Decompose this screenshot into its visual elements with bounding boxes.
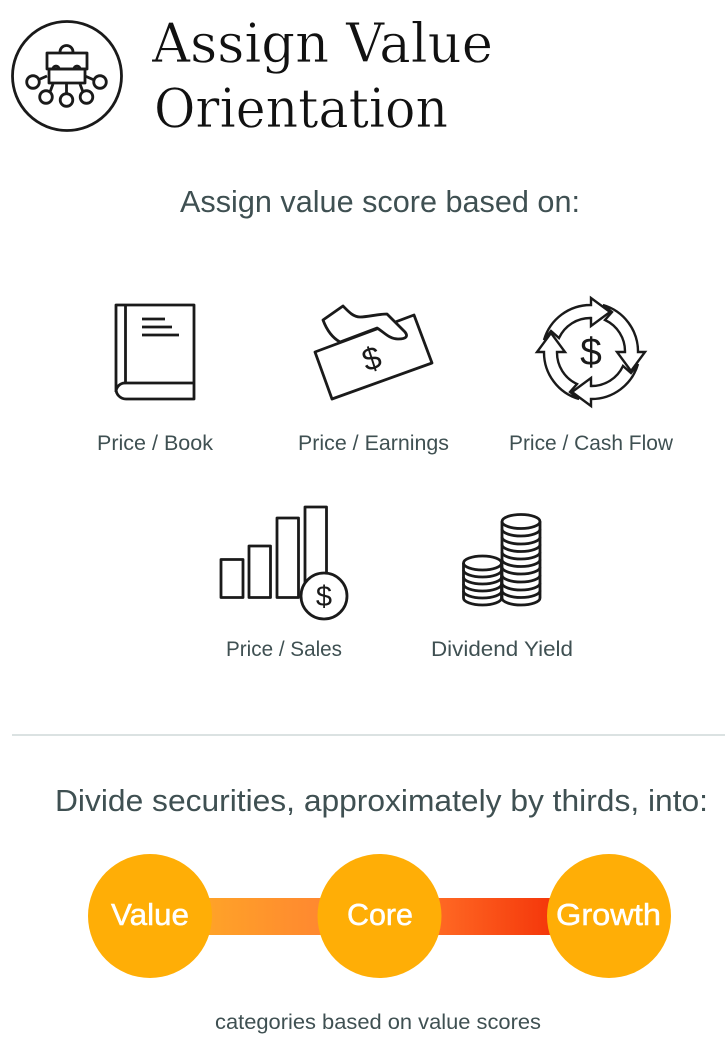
icon: briefcase network badge [12,22,122,130]
circle: core [318,854,442,978]
circle: value: Value [111,897,189,932]
connector: core to growth [435,898,553,935]
icon: book [116,305,194,399]
icon: hand holding banknote: $ [358,339,386,378]
value core growth scale [88,854,671,978]
title: Orientation [154,77,448,140]
label: price / cash flow: Price / Cash Flow [509,432,674,455]
icon: bar chart with dollar coin [221,507,347,619]
label: price / book: Price / Book [97,432,214,455]
label: price / earnings: Price / Earnings [298,432,449,455]
circle: growth: Growth [556,897,661,932]
icon: stacks of coins [464,514,540,605]
icon: bar chart with dollar coin: $ [316,581,332,613]
circle: core: Core [347,897,413,932]
icon: circular dollar arrows [537,298,645,406]
circle: value [88,854,212,978]
label: dividend yield: Dividend Yield [431,638,573,661]
icon: circular dollar arrows: $ [580,331,602,374]
icon: hand holding banknote [315,306,432,399]
title [151,12,493,140]
heading: assign value score: Assign value score based on: [180,184,580,219]
circle: growth [547,854,671,978]
label: price / sales: Price / Sales [226,638,342,661]
title: Assign Value [151,12,493,75]
caption: categories based on value scores [215,1011,541,1034]
connector: value to core [205,898,325,935]
heading: divide securities: Divide securities, approximately by thirds, into: [55,783,708,818]
